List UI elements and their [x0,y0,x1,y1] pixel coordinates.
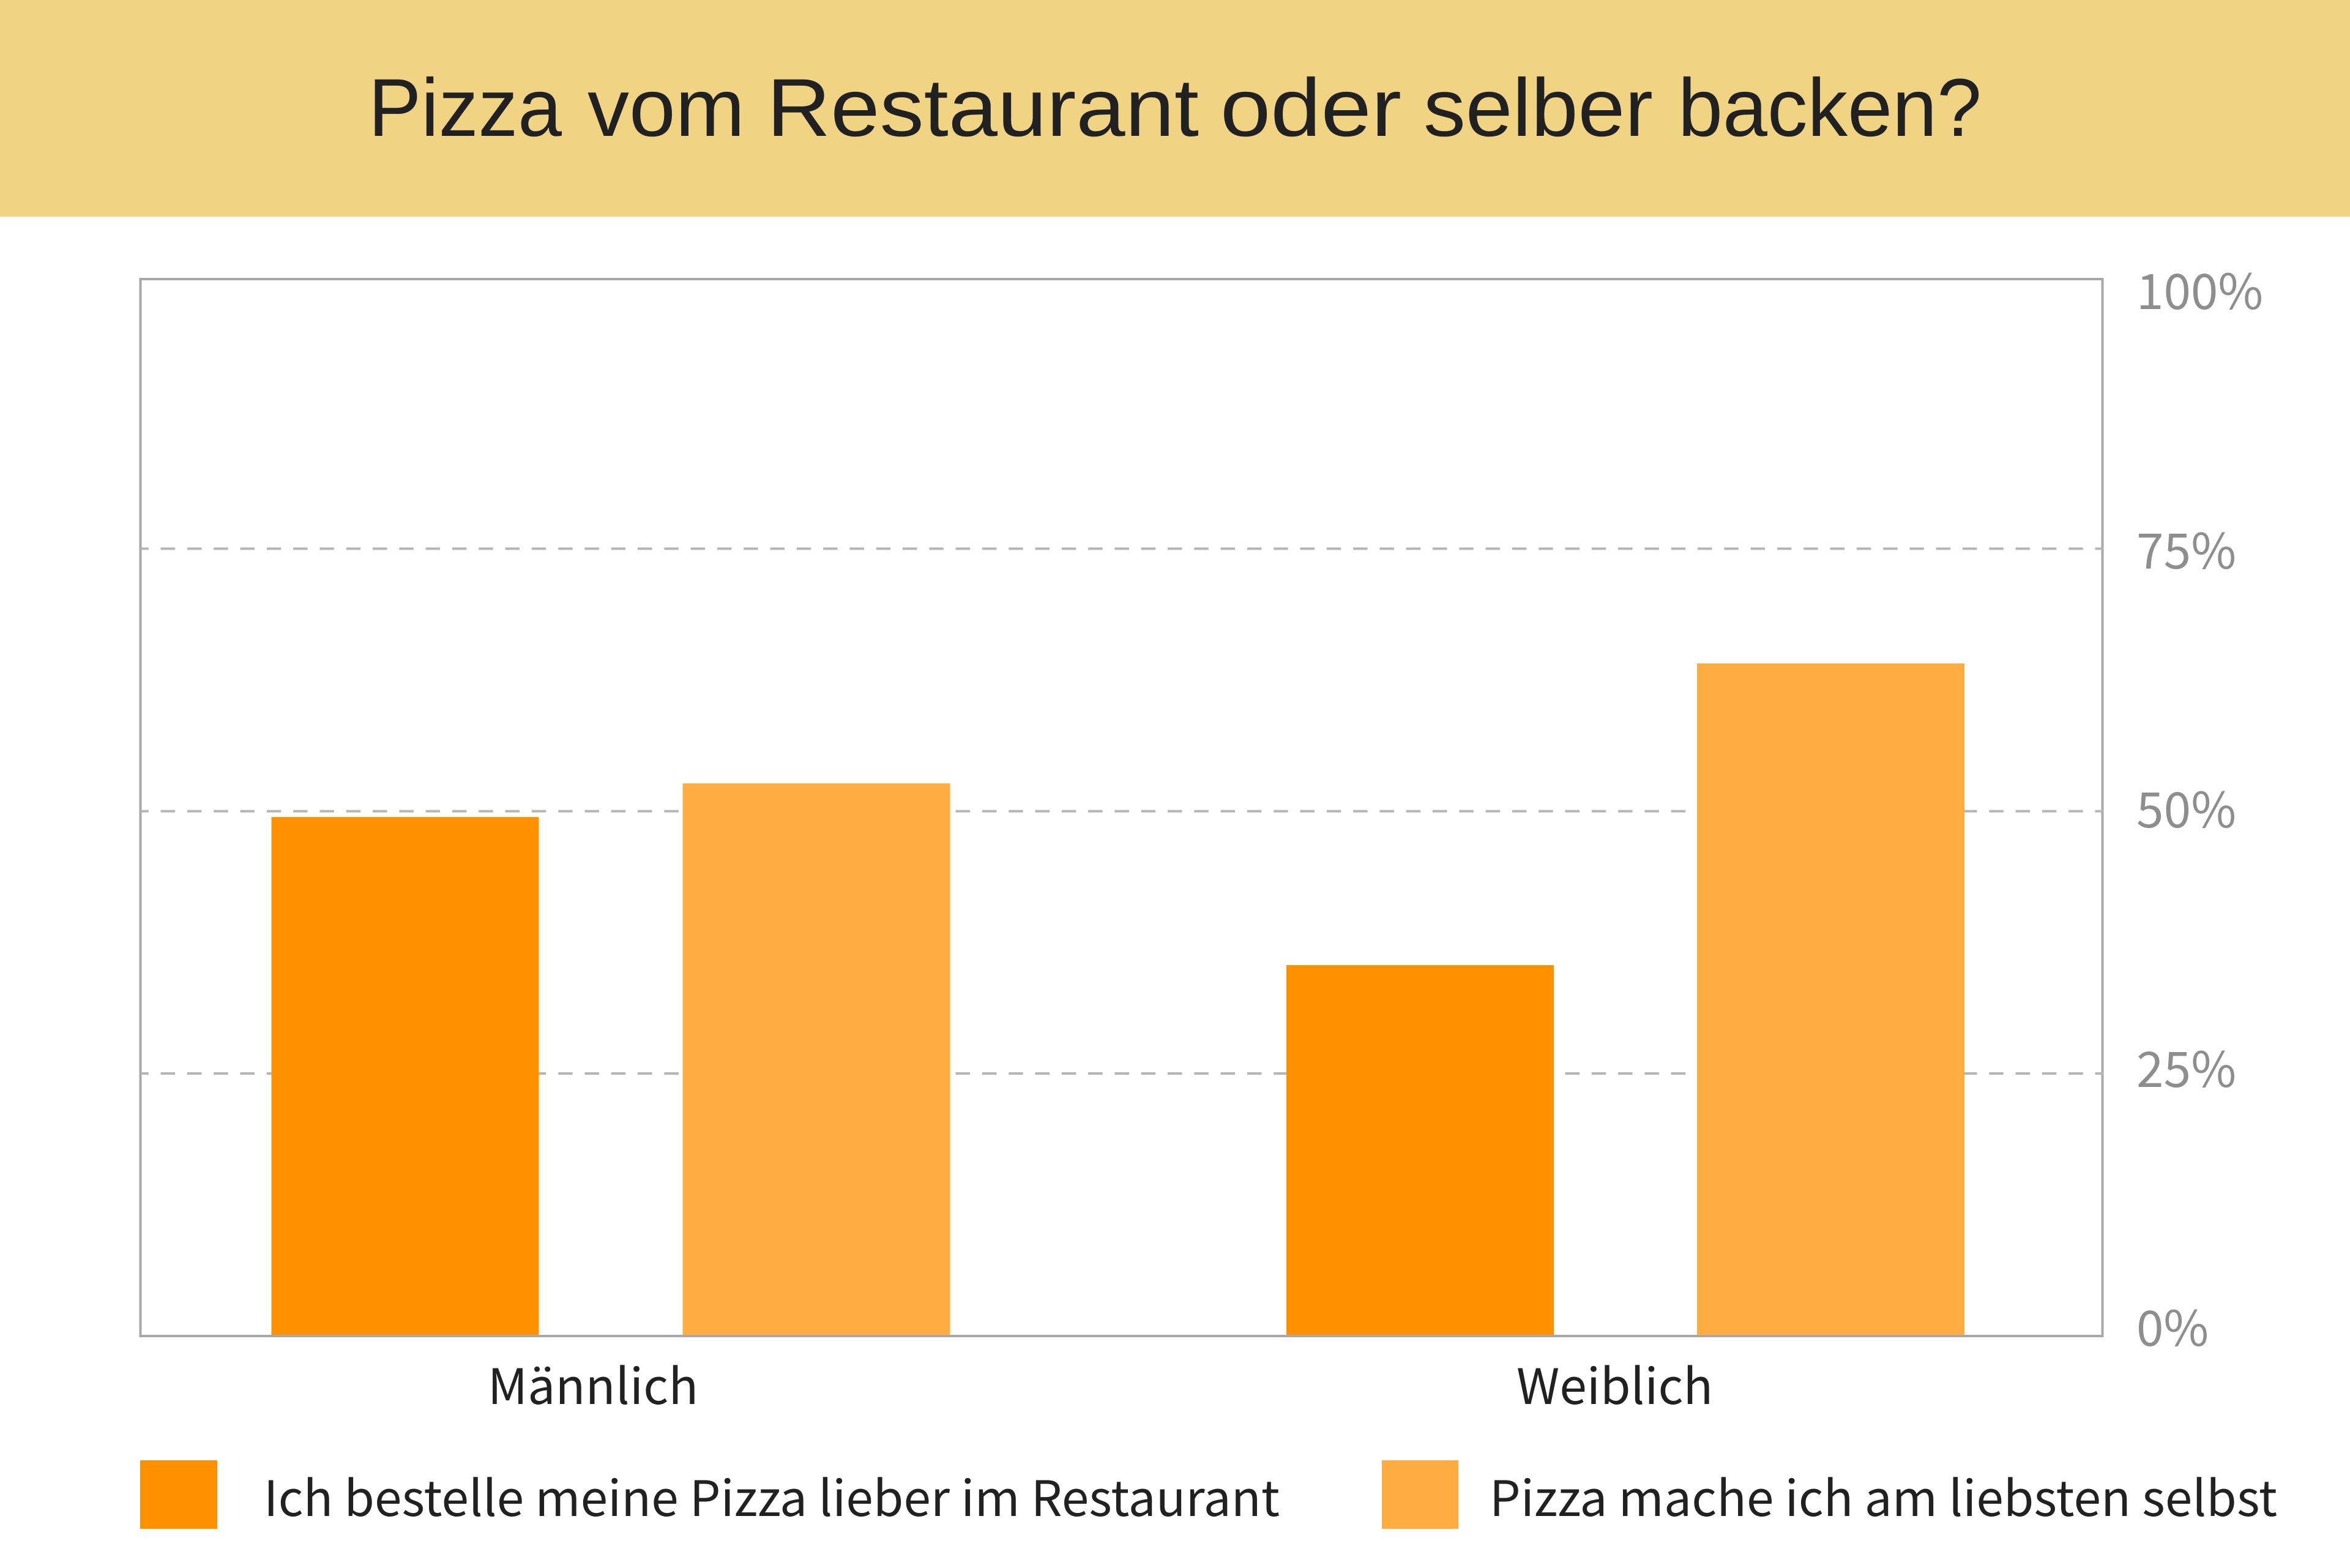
bar: Männlich, Restaurant [272,817,539,1336]
legend label: selbst: Pizza mache ich am liebsten selbst [1490,1460,2277,1531]
bar: Weiblich, selbst [1697,663,1964,1336]
y axis labels: 50% [2136,771,2236,842]
bar: Männlich, selbst [683,783,950,1336]
y axis labels: 75% [2136,512,2236,583]
title: Restaurant [767,62,1199,154]
title: backen? [1678,62,1982,154]
legend swatch: Restaurant [140,1460,217,1529]
legend [140,1460,2277,1531]
y axis labels: 25% [2136,1031,2236,1102]
title: vom [588,62,745,154]
bar: Weiblich, Restaurant [1286,965,1554,1336]
header band [0,0,2350,217]
x axis labels: Weiblich [1516,1348,1713,1419]
title: selber [1423,62,1653,154]
y axis labels: 0% [2136,1290,2209,1361]
title [368,62,1982,154]
title: Pizza [368,62,562,154]
bar chart [140,279,2104,1336]
x axis labels [488,1348,1713,1419]
y axis labels [2136,253,2263,1361]
legend swatch: selbst [1382,1460,1458,1529]
x axis labels: Männlich [488,1348,698,1419]
y axis labels: 100% [2136,253,2263,324]
title: oder [1220,62,1401,154]
legend label: Restaurant: Ich bestelle meine Pizza lieber im Restaurant [264,1460,1280,1531]
axis line bottom [140,1335,2104,1337]
